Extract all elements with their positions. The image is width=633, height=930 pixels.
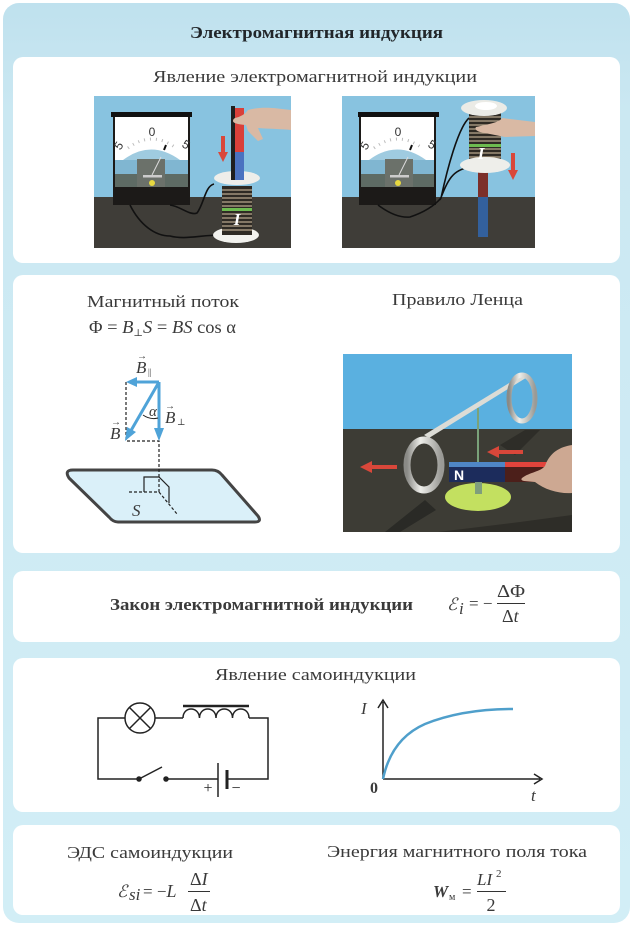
formula: magnetic field energy: 2 [486,895,496,915]
formula: self-induction emf: ΔI [190,869,209,889]
meter: 0 [149,125,156,139]
wires [378,118,470,217]
photo: magnet pushed into coil [94,96,291,248]
vectors [125,377,164,441]
formula: induced emf: Δt [502,606,520,626]
formula: magnetic flux: S [143,317,152,337]
main title: Электромагнитная индукция [190,23,443,42]
formula: magnetic flux: = BS cos α [157,317,235,337]
wires [130,184,222,238]
diagram: flux vector decomposition: → [137,351,147,362]
magnet and hand [231,106,291,180]
graph: current rise over time [360,699,542,805]
lamp [125,703,155,733]
meter [357,112,439,205]
magnet [478,170,488,237]
heading: law: Закон электромагнитной индукции [110,595,413,614]
arrow: coil motion [508,153,518,180]
arrow: ring motion [360,461,397,473]
formula: induced emf: i [459,599,464,618]
vector labels: B [136,358,147,377]
meter: 5 [357,139,373,152]
panel: law of electromagnetic induction [13,571,620,642]
coil: I [233,210,242,229]
arrow: magnet motion [487,446,523,458]
formula: magnetic field energy: LI [476,870,493,889]
formula: self-induction emf: si [129,885,141,904]
battery: + [203,780,213,797]
arrow: magnet motion [218,136,228,162]
diagram: flux vector decomposition: → [165,401,175,412]
diagram: flux vector decomposition: B [110,424,121,443]
meter: 5 [111,139,127,152]
hand [521,445,572,493]
heading: self-induction: Явление самоиндукции [215,665,416,684]
formula: magnetic field energy [433,868,506,915]
diagram: flux vector decomposition: → [111,417,121,428]
formula: magnetic flux: ⊥ [133,328,143,339]
diagram: flux vector decomposition: || [148,367,152,377]
photo: coil pushed onto magnet [342,96,535,248]
inductor [183,706,249,718]
battery [203,763,241,797]
heading: Lenz's rule: Правило Ленца [392,290,524,309]
panel: self-induction emf and magnetic field energy [13,825,620,915]
heading: magnetic field energy: Энергия магнитного поля тока [327,842,588,861]
coil and hand: I [477,144,486,163]
coil [213,171,260,243]
meter: 0 [395,125,402,139]
graph: current rise over time: I [360,699,368,718]
panel: magnetic flux and Lenz's rule [13,275,620,553]
switch [137,767,168,781]
meter [111,112,193,205]
diagram: flux vector decomposition [67,351,259,522]
formula: self-induction emf: Δt [190,895,208,915]
graph: current rise over time: 0 [370,780,378,797]
plane S [67,470,259,522]
diagram: flux vector decomposition: ⊥ [177,417,185,427]
formula: self-induction emf [117,869,210,915]
formula: induced emf: ℰ [447,595,459,614]
coil and hand [460,100,535,173]
heading: magnetic flux: Магнитный поток [87,292,240,311]
diagram: flux vector decomposition: α [149,404,158,420]
formula: magnetic flux: Φ = B [89,317,133,337]
beam and rings [407,374,553,490]
formula: self-induction emf: ℰ [117,882,129,901]
formula: magnetic field energy: = [462,882,472,901]
circuit diagram [98,703,268,797]
photo: Lenz's rule experiment [343,354,572,532]
formula: magnetic field energy: м [449,892,456,903]
magnet: N [454,467,464,483]
battery: − [231,780,241,797]
formula: induced emf: ΔΦ [497,581,525,601]
formula: induced emf [447,581,525,626]
panel: self-induction [13,658,620,812]
heading: self-induction emf: ЭДС самоиндукции [67,843,233,862]
magnet [449,462,553,483]
formula: self-induction emf: = −L [143,881,176,901]
panel: phenomenon of electromagnetic induction [13,57,620,263]
formula: induced emf: = − [469,594,492,613]
formula: magnetic field energy: 2 [496,868,502,880]
heading: phenomenon: Явление электромагнитной индукции [153,67,477,86]
formula: magnetic field energy: W [433,882,450,901]
meter: 5 [426,137,439,152]
graph: current rise over time: t [531,786,537,805]
diagram: flux vector decomposition: B [165,408,176,427]
diagram: flux vector decomposition: S [132,501,141,520]
meter: 5 [180,137,193,152]
